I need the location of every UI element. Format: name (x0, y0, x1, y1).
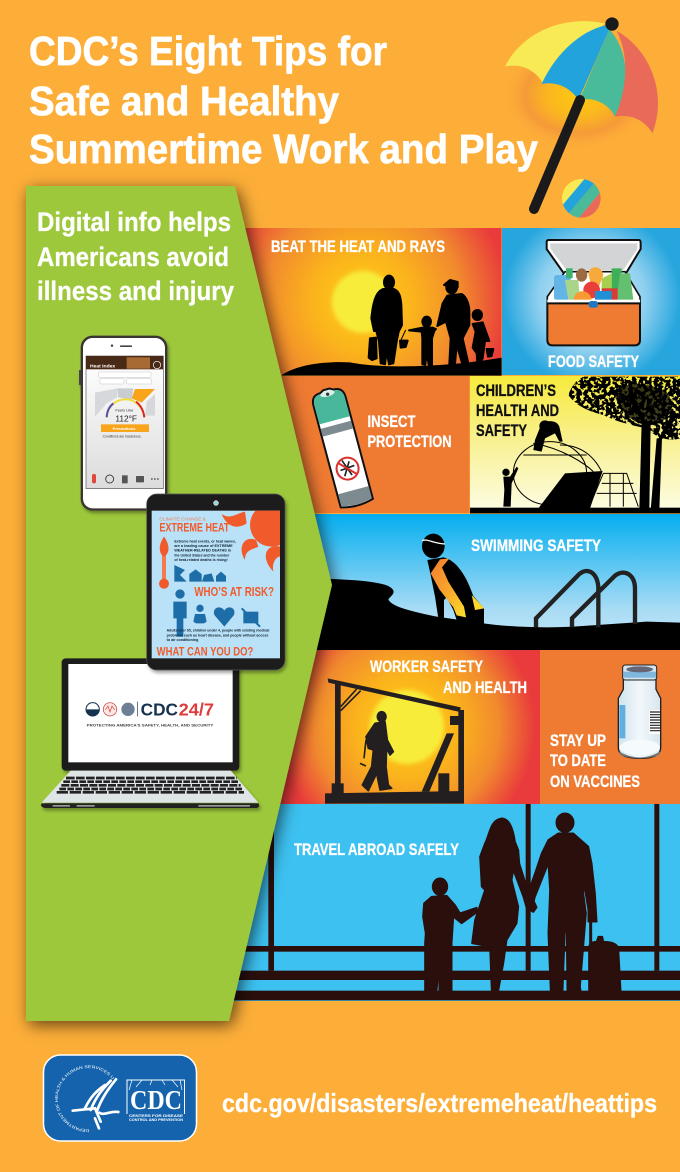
icon: cooler (547, 240, 641, 345)
label: children's health and safety: SAFETY (476, 422, 527, 440)
icon: vaccine vial (618, 665, 661, 758)
panel: swimming safety (280, 514, 680, 651)
title: CDC’s Eight Tips for (29, 28, 387, 74)
device: phone with heat index app: Feels Like (115, 407, 134, 412)
device: laptop with CDC 24/7: 24/7 (179, 700, 214, 720)
label: insect protection (368, 413, 452, 451)
label: worker safety and health (370, 658, 527, 697)
label: stay up to date on vaccines: ON VACCINES (550, 773, 640, 791)
label: food safety: FOOD SAFETY (548, 353, 639, 371)
label: worker safety and health: AND HEALTH (443, 679, 527, 697)
device: phone with heat index app: Heat Index (90, 363, 115, 369)
heading: digital info helps (37, 207, 234, 306)
device: tablet with extreme heat page: WHAT CAN YOU DO? (157, 646, 253, 659)
device: laptop with CDC 24/7: CDC (141, 700, 178, 720)
label: stay up to date on vaccines: STAY UP (550, 732, 606, 750)
device: phone with heat index app: 112°F (115, 413, 137, 423)
device: tablet with extreme heat page (147, 494, 293, 670)
label: children's health and safety: HEALTH AND (476, 402, 559, 420)
logo: CDC box: CONTROL AND PREVENTION (129, 1118, 184, 1122)
panel: food safety (502, 228, 680, 375)
device: tablet with extreme heat page: the United States and the number (174, 553, 230, 557)
logo: CDC box: CDC (130, 1085, 182, 1115)
travelling family (423, 813, 621, 991)
device: tablet with extreme heat page: WHO’S AT RISK? (194, 585, 274, 599)
label: children's health and safety: CHILDREN’S (476, 382, 556, 400)
icon: HHS eagle seal: DEPARTMENT OF HEALTH & HUMAN SERVICES USA (55, 1065, 114, 1132)
label: worker safety and health: WORKER SAFETY (370, 658, 483, 676)
heading: digital info helps: Digital info helps (37, 207, 231, 237)
icon: repellent can (310, 385, 374, 510)
device: tablet with extreme heat page: CLIMATE CHANGE & (159, 517, 207, 522)
icon: HHS eagle seal (55, 1065, 120, 1132)
panel: worker safety and health (270, 650, 540, 804)
panel: travel abroad safely (230, 804, 680, 1001)
label: beat the heat and rays: BEAT THE HEAT AND RAYS (271, 238, 445, 256)
label: insect protection: PROTECTION (368, 433, 452, 451)
heading: digital info helps: Americans avoid (37, 242, 229, 272)
title: Safe and Healthy (29, 78, 339, 124)
device: laptop with CDC 24/7 (41, 658, 259, 808)
panel: digital info (26, 186, 332, 1021)
device: phone with heat index app (79, 336, 167, 511)
device: tablet with extreme heat page: EXTREME HEAT (159, 521, 230, 535)
panel: insect protection (260, 376, 470, 513)
label: children's health and safety (476, 382, 559, 440)
label: stay up to date on vaccines (550, 732, 640, 791)
label: insect protection: INSECT (368, 413, 416, 431)
device: phone with heat index app: Conditions are hazardous. (103, 434, 142, 438)
panel: children's health and safety (470, 375, 680, 514)
swimmer (422, 534, 484, 624)
worker (360, 712, 393, 791)
logo: CDC box (127, 1080, 184, 1122)
device: tablet with extreme heat page: problems such as heart disease, and people without access (167, 633, 269, 637)
heading: digital info helps: illness and injury (37, 276, 234, 306)
title: Summertime Work and Play (29, 126, 538, 172)
logo: CDC box: CENTERS FOR DISEASE (129, 1114, 184, 1118)
logo: HHS and CDC (42, 1054, 198, 1142)
device: tablet with extreme heat page: to air conditioning (167, 638, 198, 642)
label: stay up to date on vaccines: TO DATE (550, 752, 606, 770)
title (29, 28, 538, 172)
device: tablet with extreme heat page: Adults over 65, children under 4, people with existing medical (167, 629, 269, 633)
icon: beach umbrella and ball (500, 17, 658, 232)
device: tablet with extreme heat page: of heat-related deaths is rising! (174, 558, 228, 562)
label: swimming safety: SWIMMING SAFETY (471, 537, 601, 555)
label: travel abroad safely: TRAVEL ABROAD SAFELY (294, 841, 459, 859)
device: phone with heat index app: Precautions (113, 426, 136, 431)
device: tablet with extreme heat page: Extreme heat events, or heat waves, (174, 539, 236, 543)
device: tablet with extreme heat page: WEATHER-RELATED DEATHS in (174, 549, 231, 553)
panel: stay up to date on vaccines (540, 650, 680, 804)
panel: beat the heat and rays (230, 228, 502, 376)
device: laptop with CDC 24/7: PROTECTING AMERICA’S SAFETY, HEALTH, AND SECURITY (87, 724, 214, 728)
device: tablet with extreme heat page: are a leading cause of EXTREME (174, 544, 233, 548)
